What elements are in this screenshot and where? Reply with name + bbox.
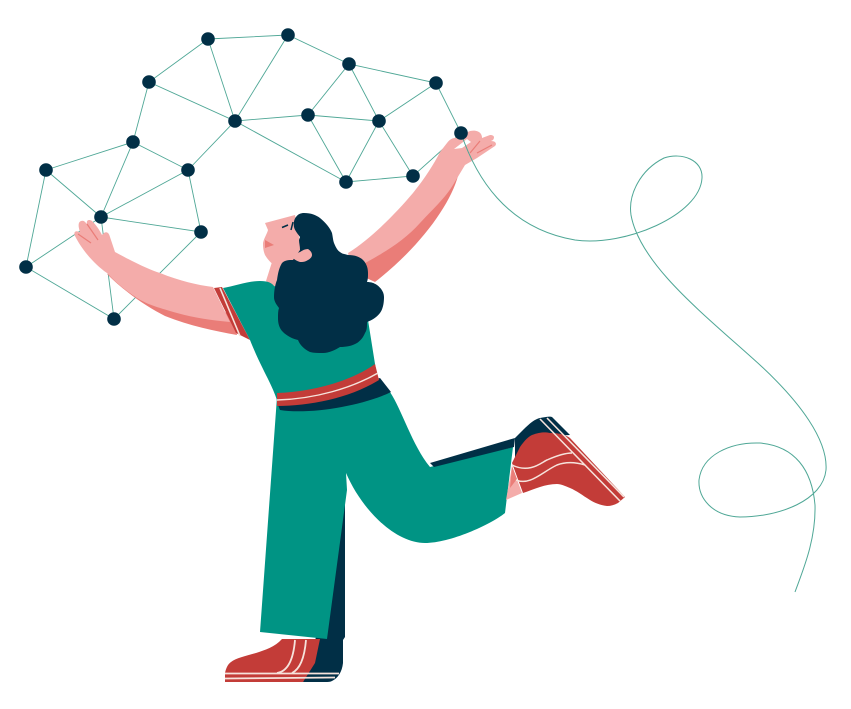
dress bodice <box>223 281 378 400</box>
neck <box>266 262 282 290</box>
right arm, raised <box>348 131 496 282</box>
belt <box>277 364 379 406</box>
hair <box>274 213 384 353</box>
front shoe <box>512 417 625 506</box>
network nodes <box>19 28 468 326</box>
foot <box>506 466 522 500</box>
left arm <box>74 220 237 335</box>
dress skirt and leg <box>260 380 513 639</box>
belt shadow <box>278 378 391 411</box>
back shoe <box>225 639 339 682</box>
thread curve <box>461 133 826 592</box>
face <box>263 215 305 270</box>
sleeve cuff <box>214 287 250 340</box>
ear <box>293 249 312 262</box>
back leg shadow <box>303 490 345 682</box>
network lines <box>26 35 461 319</box>
leg shadow top <box>430 438 515 467</box>
